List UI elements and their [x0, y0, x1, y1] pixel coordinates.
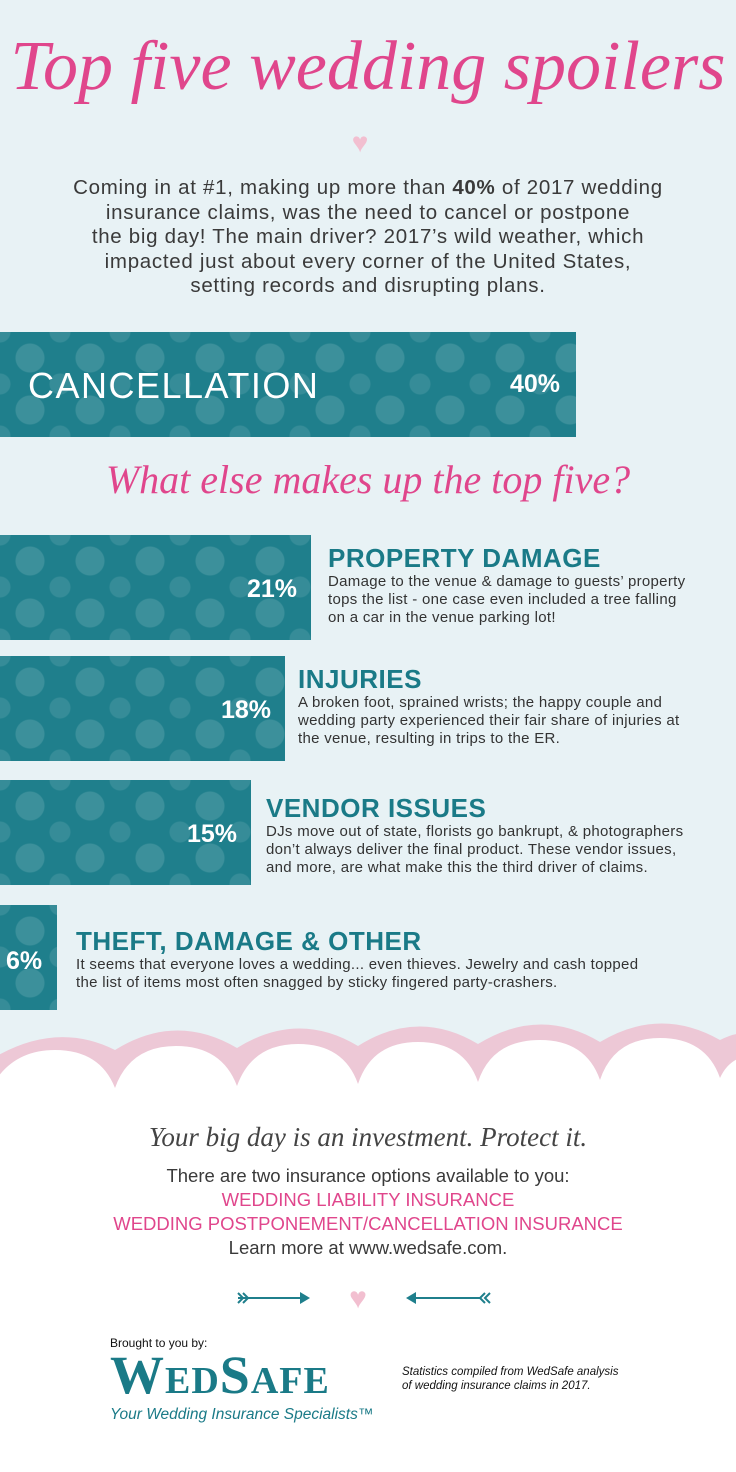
text: injuries [298, 664, 680, 747]
bar: vendor issues [0, 780, 251, 885]
bar: theft: 6% [6, 947, 42, 975]
intro text: the big day! The main driver? 2017’s wild weather, which [92, 225, 644, 248]
bar: theft [0, 905, 57, 1010]
text: vendor issues: DJs move out of state, florists go bankrupt, & photographers [266, 823, 683, 840]
scalloped border [0, 1024, 736, 1090]
logo: WedSafe: WEDSAFE [110, 1345, 330, 1405]
logo: WedSafe: Brought to you by: [110, 1336, 207, 1350]
text: property damage: tops the list - one case even included a tree falling [328, 591, 677, 608]
intro text: impacted just about every corner of the United States, [105, 250, 631, 272]
text: vendor issues: don’t always deliver the final product. These vendor issues, [266, 841, 676, 858]
logo: WedSafe [110, 1336, 373, 1423]
text: property damage [328, 543, 686, 626]
text: theft: It seems that everyone loves a wedding... even thieves. Jewelry and cash topped [76, 956, 638, 973]
text: theft [76, 926, 638, 991]
footnote: of wedding insurance claims in 2017. [402, 1380, 591, 1392]
subtitle: What else makes up the top five? [106, 457, 630, 502]
bar: property damage [0, 535, 311, 640]
text: property damage: Damage to the venue & damage to guests’ property [328, 573, 685, 590]
text: injuries: A broken foot, sprained wrists; the happy couple and [298, 694, 662, 711]
intro text: setting records and disrupting plans. [190, 274, 546, 297]
arrows and heart [237, 1284, 491, 1314]
intro text [73, 176, 663, 297]
footnote: Statistics compiled from WedSafe analysis [402, 1366, 618, 1378]
footnote [402, 1366, 618, 1392]
text: theft: the list of items most often snagged by sticky fingered party-crashers. [76, 974, 558, 991]
insurance options text: WEDDING POSTPONEMENT/CANCELLATION INSURANCE [113, 1213, 623, 1234]
insurance options text [113, 1165, 623, 1258]
insurance options text: There are two insurance options available to you: [166, 1165, 570, 1186]
icon: heart: ♥ [352, 127, 368, 158]
bar: cancellation [0, 332, 576, 437]
intro text: insurance claims, was the need to cancel or postpone [106, 200, 630, 224]
insurance options text: WEDDING LIABILITY INSURANCE [222, 1189, 514, 1210]
bar: vendor issues: 15% [187, 820, 237, 848]
text: vendor issues [266, 793, 683, 876]
text: property damage: PROPERTY DAMAGE [328, 543, 601, 573]
bar: injuries: 18% [221, 696, 271, 724]
title: Top five wedding spoilers [11, 28, 725, 105]
bar: property damage: 21% [247, 575, 297, 603]
text: injuries: INJURIES [298, 664, 422, 694]
insurance options text: Learn more at www.wedsafe.com. [229, 1237, 507, 1258]
tagline: Your big day is an investment. Protect it. [149, 1122, 587, 1152]
logo: WedSafe: Your Wedding Insurance Specialists™ [110, 1406, 373, 1423]
text: vendor issues: VENDOR ISSUES [266, 793, 486, 823]
text: injuries: wedding party experienced their fair share of injuries at [298, 712, 679, 729]
text: vendor issues: and more, are what make this the third driver of claims. [266, 859, 648, 876]
text: injuries: the venue, resulting in trips to the ER. [298, 730, 560, 747]
bar: cancellation: CANCELLATION [28, 365, 319, 406]
text: theft: THEFT, DAMAGE & OTHER [76, 926, 422, 956]
text: property damage: on a car in the venue parking lot! [328, 609, 556, 626]
intro text: Coming in at #1, making up more than 40% of 2017 wedding [73, 176, 663, 199]
bar: cancellation: 40% [510, 370, 560, 398]
bar: injuries [0, 656, 285, 761]
